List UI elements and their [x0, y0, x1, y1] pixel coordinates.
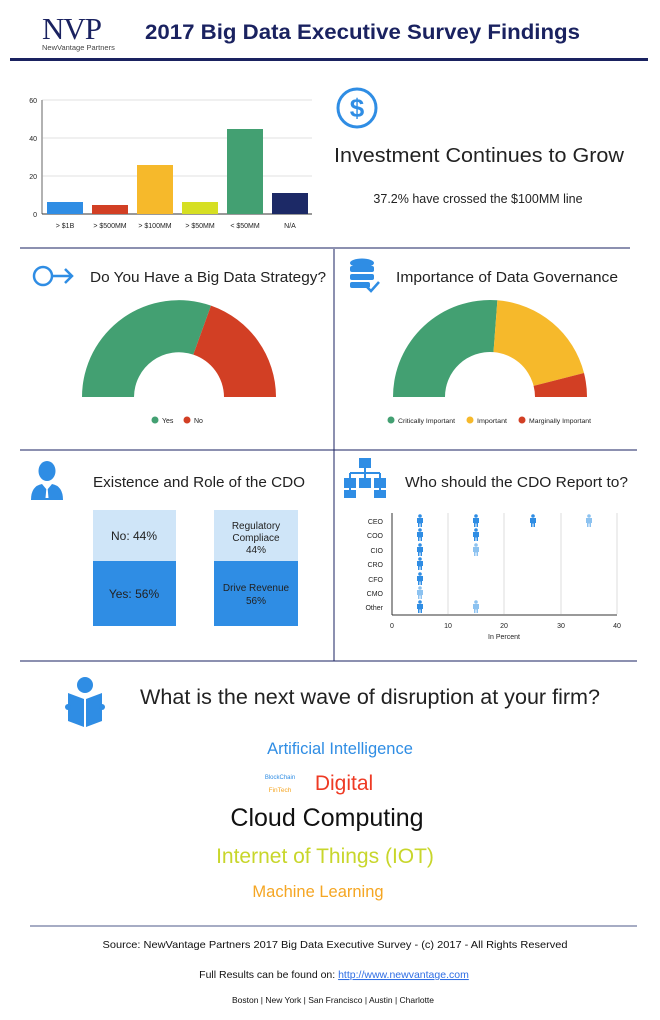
icon: database: [350, 258, 379, 291]
box: role: Drive Revenue: [223, 583, 290, 594]
word cloud: Machine Learning: [252, 883, 384, 901]
donut chart: [82, 300, 276, 397]
pictogram chart: CIO: [371, 548, 384, 555]
box: role: [214, 510, 298, 626]
pictogram chart: CEO: [368, 519, 384, 526]
heading: Who should the CDO Report to?: [405, 474, 628, 491]
word cloud: Internet of Things (IOT): [216, 845, 434, 868]
panel: disruption: [65, 677, 600, 901]
logo: [42, 11, 115, 52]
legend: Marginally Important: [529, 418, 591, 425]
footer: Full Results can be found on: http://www.newvantage.com: [199, 969, 469, 981]
pictogram chart: 40: [613, 623, 621, 630]
pictogram chart: [365, 513, 621, 641]
text: stat: 37.2% have crossed the $100MM line: [373, 192, 583, 206]
box: role: 56%: [246, 596, 266, 607]
logo: NewVantage Partners: [42, 43, 115, 52]
footer: Source: NewVantage Partners 2017 Big Data Executive Survey - (c) 2017 - All Rights Reserved: [102, 939, 568, 951]
panel: CDO reporting: [345, 459, 628, 641]
pictogram chart: Other: [365, 605, 384, 612]
word cloud: Digital: [315, 772, 373, 795]
icon: book reader: [65, 677, 105, 727]
box: existence: Yes: 56%: [109, 587, 159, 601]
pictogram chart: CRO: [367, 562, 384, 569]
heading: Existence and Role of the CDO: [93, 474, 305, 491]
heading: Do You Have a Big Data Strategy?: [90, 269, 326, 286]
bar chart: investment: N/A: [284, 223, 296, 230]
bar chart: investment: > $500MM: [93, 223, 127, 230]
icon: person: [31, 461, 63, 500]
bar chart: investment: [29, 98, 312, 230]
word cloud: BlockChain: [265, 775, 295, 781]
bar chart: investment: 20: [29, 174, 37, 181]
box: role: Regulatory: [232, 521, 280, 532]
legend: Yes: [162, 418, 174, 425]
logo: NVP: [42, 11, 101, 46]
pictogram chart: 0: [390, 623, 394, 630]
panel: CDO existence: [31, 461, 305, 626]
legend: [152, 416, 203, 425]
pictogram chart: CMO: [367, 591, 384, 598]
bar chart: investment: > $100MM: [138, 223, 172, 230]
pictogram chart: COO: [367, 533, 384, 540]
pictogram chart: CFO: [368, 577, 384, 584]
heading: Importance of Data Governance: [396, 269, 618, 286]
heading: What is the next wave of disruption at your firm?: [140, 686, 600, 709]
legend: Important: [477, 418, 507, 425]
pictogram chart: 30: [557, 623, 565, 630]
footer: Boston | New York | San Francisco | Austin | Charlotte: [232, 995, 434, 1005]
legend: [388, 416, 591, 425]
heading: investment: Investment Continues to Grow: [334, 145, 625, 167]
word cloud: [216, 740, 434, 901]
title: 2017 Big Data Executive Survey Findings: [145, 21, 580, 44]
panel: strategy: [34, 267, 326, 425]
box: existence: No: 44%: [111, 529, 157, 543]
icon: hierarchy: [345, 459, 385, 497]
legend: Critically Important: [398, 418, 455, 425]
icon: dollar: [338, 89, 376, 127]
word cloud: Cloud Computing: [230, 804, 424, 832]
word cloud: Artificial Intelligence: [267, 740, 413, 758]
icon: arrow: [34, 267, 72, 285]
bar chart: investment: 60: [29, 98, 37, 105]
footer: [102, 939, 568, 1005]
pictogram chart: In Percent: [488, 634, 520, 641]
bar chart: investment: 0: [33, 212, 37, 219]
word cloud: FinTech: [269, 787, 292, 794]
bar chart: investment: > $1B: [56, 223, 75, 230]
pictogram chart: 10: [444, 623, 452, 630]
legend: No: [194, 418, 203, 425]
box: existence: [93, 510, 176, 626]
header: [42, 11, 580, 52]
box: role: Compliace: [232, 533, 280, 544]
bar chart: investment: > $50MM: [185, 223, 215, 230]
donut chart: [393, 300, 587, 397]
pictogram chart: 20: [500, 623, 508, 630]
panel: governance: [350, 258, 618, 425]
icon: dollar: $: [350, 93, 365, 123]
bar chart: investment: < $50MM: [230, 223, 260, 230]
box: role: 44%: [246, 545, 266, 556]
bar chart: investment: 40: [29, 136, 37, 143]
